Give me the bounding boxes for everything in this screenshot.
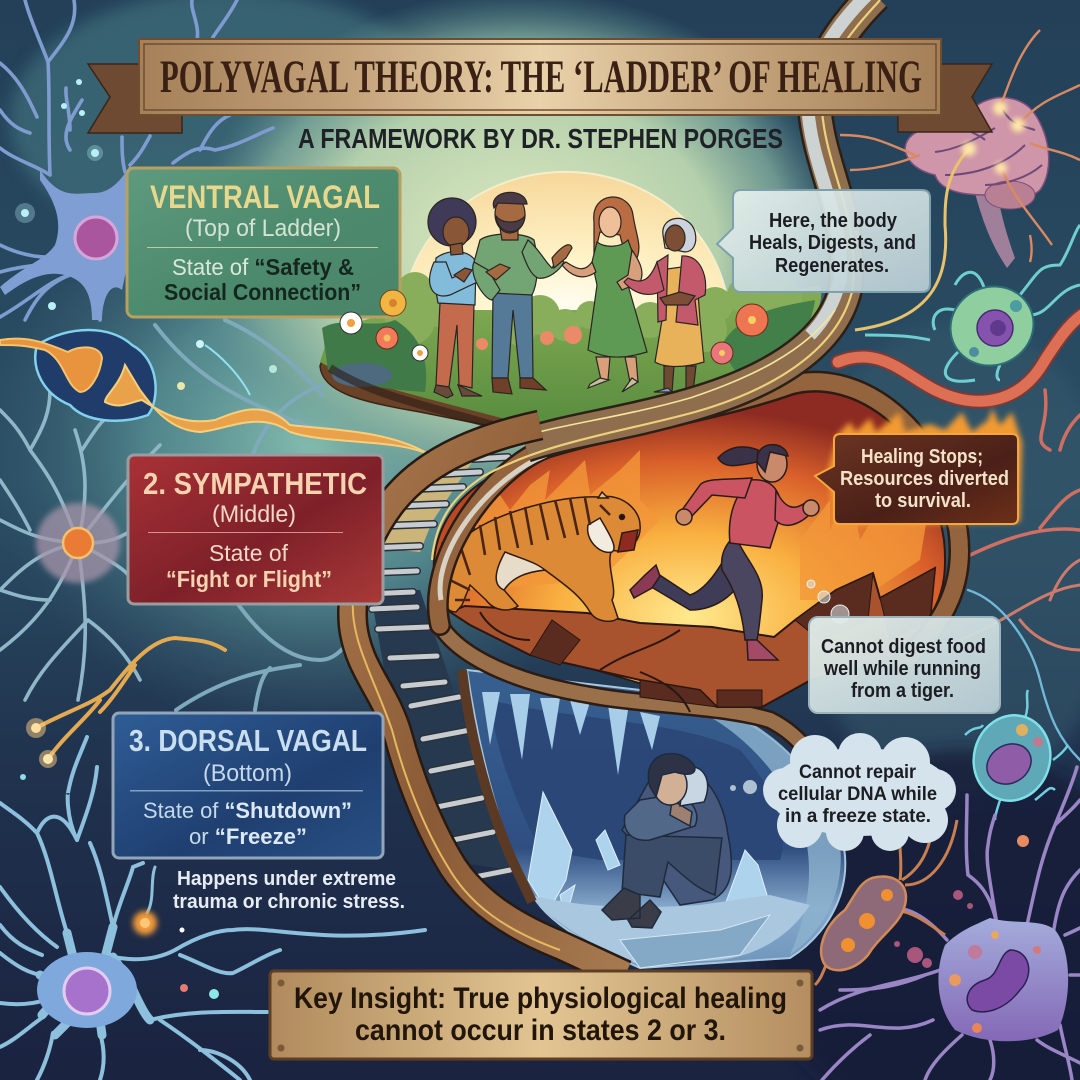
callout: cannot repair cloud <box>763 733 956 851</box>
flowers back <box>476 326 582 350</box>
runner <box>630 445 819 660</box>
callout: healing stops: Healing Stops; <box>861 446 983 468</box>
bubbles <box>807 580 849 623</box>
teal cell <box>964 690 1068 820</box>
panel: sympathetic <box>128 455 383 604</box>
grass <box>320 285 821 428</box>
flower white <box>340 312 362 334</box>
title ribbon tails <box>88 64 992 133</box>
green cell <box>865 225 1080 381</box>
person: woman in blue <box>428 198 490 398</box>
wisp to orange glow <box>147 867 155 913</box>
ice arch right <box>700 700 841 955</box>
heading: VENTRAL VAGAL <box>150 179 380 215</box>
flames <box>828 408 1022 526</box>
neuron: bottom left blue purple <box>0 737 425 1080</box>
callout: heals digests regenerates: Heals, Digests, and <box>749 232 916 254</box>
rivets <box>278 980 804 1052</box>
icon: orange nucleus <box>63 528 93 558</box>
title plaque <box>139 39 941 115</box>
brain <box>840 30 1080 330</box>
floor <box>530 895 810 965</box>
sun arch <box>402 172 729 312</box>
left rail <box>352 425 625 975</box>
floor blocks <box>620 915 770 968</box>
panel: dorsal vagal <box>113 713 383 858</box>
callout: healing stops: to survival. <box>875 490 971 512</box>
person: woman in green dress <box>562 197 647 392</box>
ladder <box>365 457 532 902</box>
icon: purple nucleus <box>75 217 117 259</box>
ice crystals <box>528 792 770 920</box>
person: bearded man <box>473 192 572 394</box>
callout: healing stops: Resources diverted <box>840 468 1009 490</box>
ladder inner rail <box>462 670 532 902</box>
description line two: “Fight or Flight” <box>166 566 332 592</box>
pink spots <box>894 890 973 968</box>
ladder shadow <box>370 590 510 870</box>
rungs <box>365 457 510 879</box>
tiger <box>442 492 640 621</box>
synapse glow <box>0 330 430 455</box>
description line two: or “Freeze” <box>189 824 307 849</box>
callout: cannot repair cloud: Cannot repair <box>799 762 917 783</box>
note: extreme trauma <box>173 868 405 913</box>
flames background <box>434 387 945 705</box>
gold axon lower left <box>26 638 225 768</box>
scene: fire and tiger <box>434 387 945 712</box>
rung tops <box>365 457 510 879</box>
fire frame <box>438 382 960 660</box>
rock shadow <box>530 568 935 707</box>
cloud body <box>763 733 956 851</box>
flower coral <box>376 327 398 349</box>
fire frame inner light <box>440 455 546 600</box>
flame tongues <box>470 450 930 600</box>
callout body <box>815 434 1018 524</box>
lower ribbon <box>440 625 835 810</box>
panel: ventral vagal <box>127 168 400 317</box>
sublabel: (Top of Ladder) <box>185 215 341 242</box>
flower pink <box>711 342 733 364</box>
icon: dot glow <box>15 79 103 310</box>
note: extreme trauma: Happens under extreme <box>177 868 396 890</box>
icon: glow dots <box>20 774 219 999</box>
island rim <box>320 340 770 436</box>
callout: heals digests regenerates: Regenerates. <box>775 255 889 277</box>
sublabel: (Middle) <box>212 501 296 528</box>
spark dot <box>1017 835 1029 847</box>
divider <box>147 247 378 248</box>
callout: cannot digest: well while running <box>823 658 981 680</box>
ice frame <box>467 670 845 968</box>
divider <box>130 790 363 792</box>
icon: bottom left nucleus <box>64 968 110 1014</box>
orange cell <box>815 820 957 985</box>
insight line two: cannot occur in states 2 or 3. <box>355 1014 726 1047</box>
scene: ice cave <box>467 670 845 968</box>
description: State of “Safety & <box>172 254 354 280</box>
heading: 2. SYMPATHETIC <box>143 466 367 501</box>
note: extreme trauma: trauma or chronic stress. <box>173 891 405 913</box>
sublabel: (Bottom) <box>203 760 292 787</box>
red vessels <box>838 315 1080 760</box>
subtitle: A FRAMEWORK BY DR. STEPHEN PORGES <box>298 123 783 154</box>
island wood band <box>330 368 525 435</box>
sad figure <box>602 753 731 928</box>
flower small <box>412 345 428 361</box>
thought bubbles <box>730 780 757 794</box>
callout: cannot repair cloud: cellular DNA while <box>778 784 937 805</box>
description line two: Social Connection” <box>164 279 361 305</box>
flower yellow <box>380 290 406 316</box>
bushes <box>385 272 802 352</box>
callout: healing stops <box>815 408 1022 526</box>
main ribbon <box>525 0 875 445</box>
callout: cannot digest: Cannot digest food <box>821 636 986 658</box>
ladder backing <box>375 462 472 552</box>
icicles <box>482 692 660 775</box>
ribbon frames <box>330 0 960 975</box>
callout: cannot digest: from a tiger. <box>851 680 954 702</box>
neuron: connecting fibers <box>155 320 372 710</box>
callout: heals digests regenerates: Here, the body <box>769 210 898 232</box>
callout: cannot digest <box>809 617 1000 713</box>
ground rocks <box>450 568 935 707</box>
heading: 3. DORSAL VAGAL <box>129 723 367 758</box>
foliage left <box>322 320 426 392</box>
description: State of <box>209 540 289 566</box>
neuron: top left purple <box>0 0 273 320</box>
dark cave <box>490 700 783 860</box>
divider <box>148 532 343 533</box>
neuron: middle orange <box>0 390 160 700</box>
tiger stripes <box>450 498 610 600</box>
ground crack <box>480 612 690 712</box>
flower large <box>736 304 768 336</box>
person: older woman <box>624 218 706 398</box>
insight line one: Key Insight: True physiological healing <box>294 982 787 1015</box>
neuron: bottom right purple <box>820 767 1080 1080</box>
callout: heals digests regenerates <box>717 190 930 292</box>
key insight plaque <box>270 971 812 1059</box>
scene: safety garden <box>320 172 821 436</box>
description: State of “Shutdown” <box>143 798 352 823</box>
foliage right <box>722 300 815 382</box>
callout: cannot repair cloud: in a freeze state. <box>785 806 931 827</box>
